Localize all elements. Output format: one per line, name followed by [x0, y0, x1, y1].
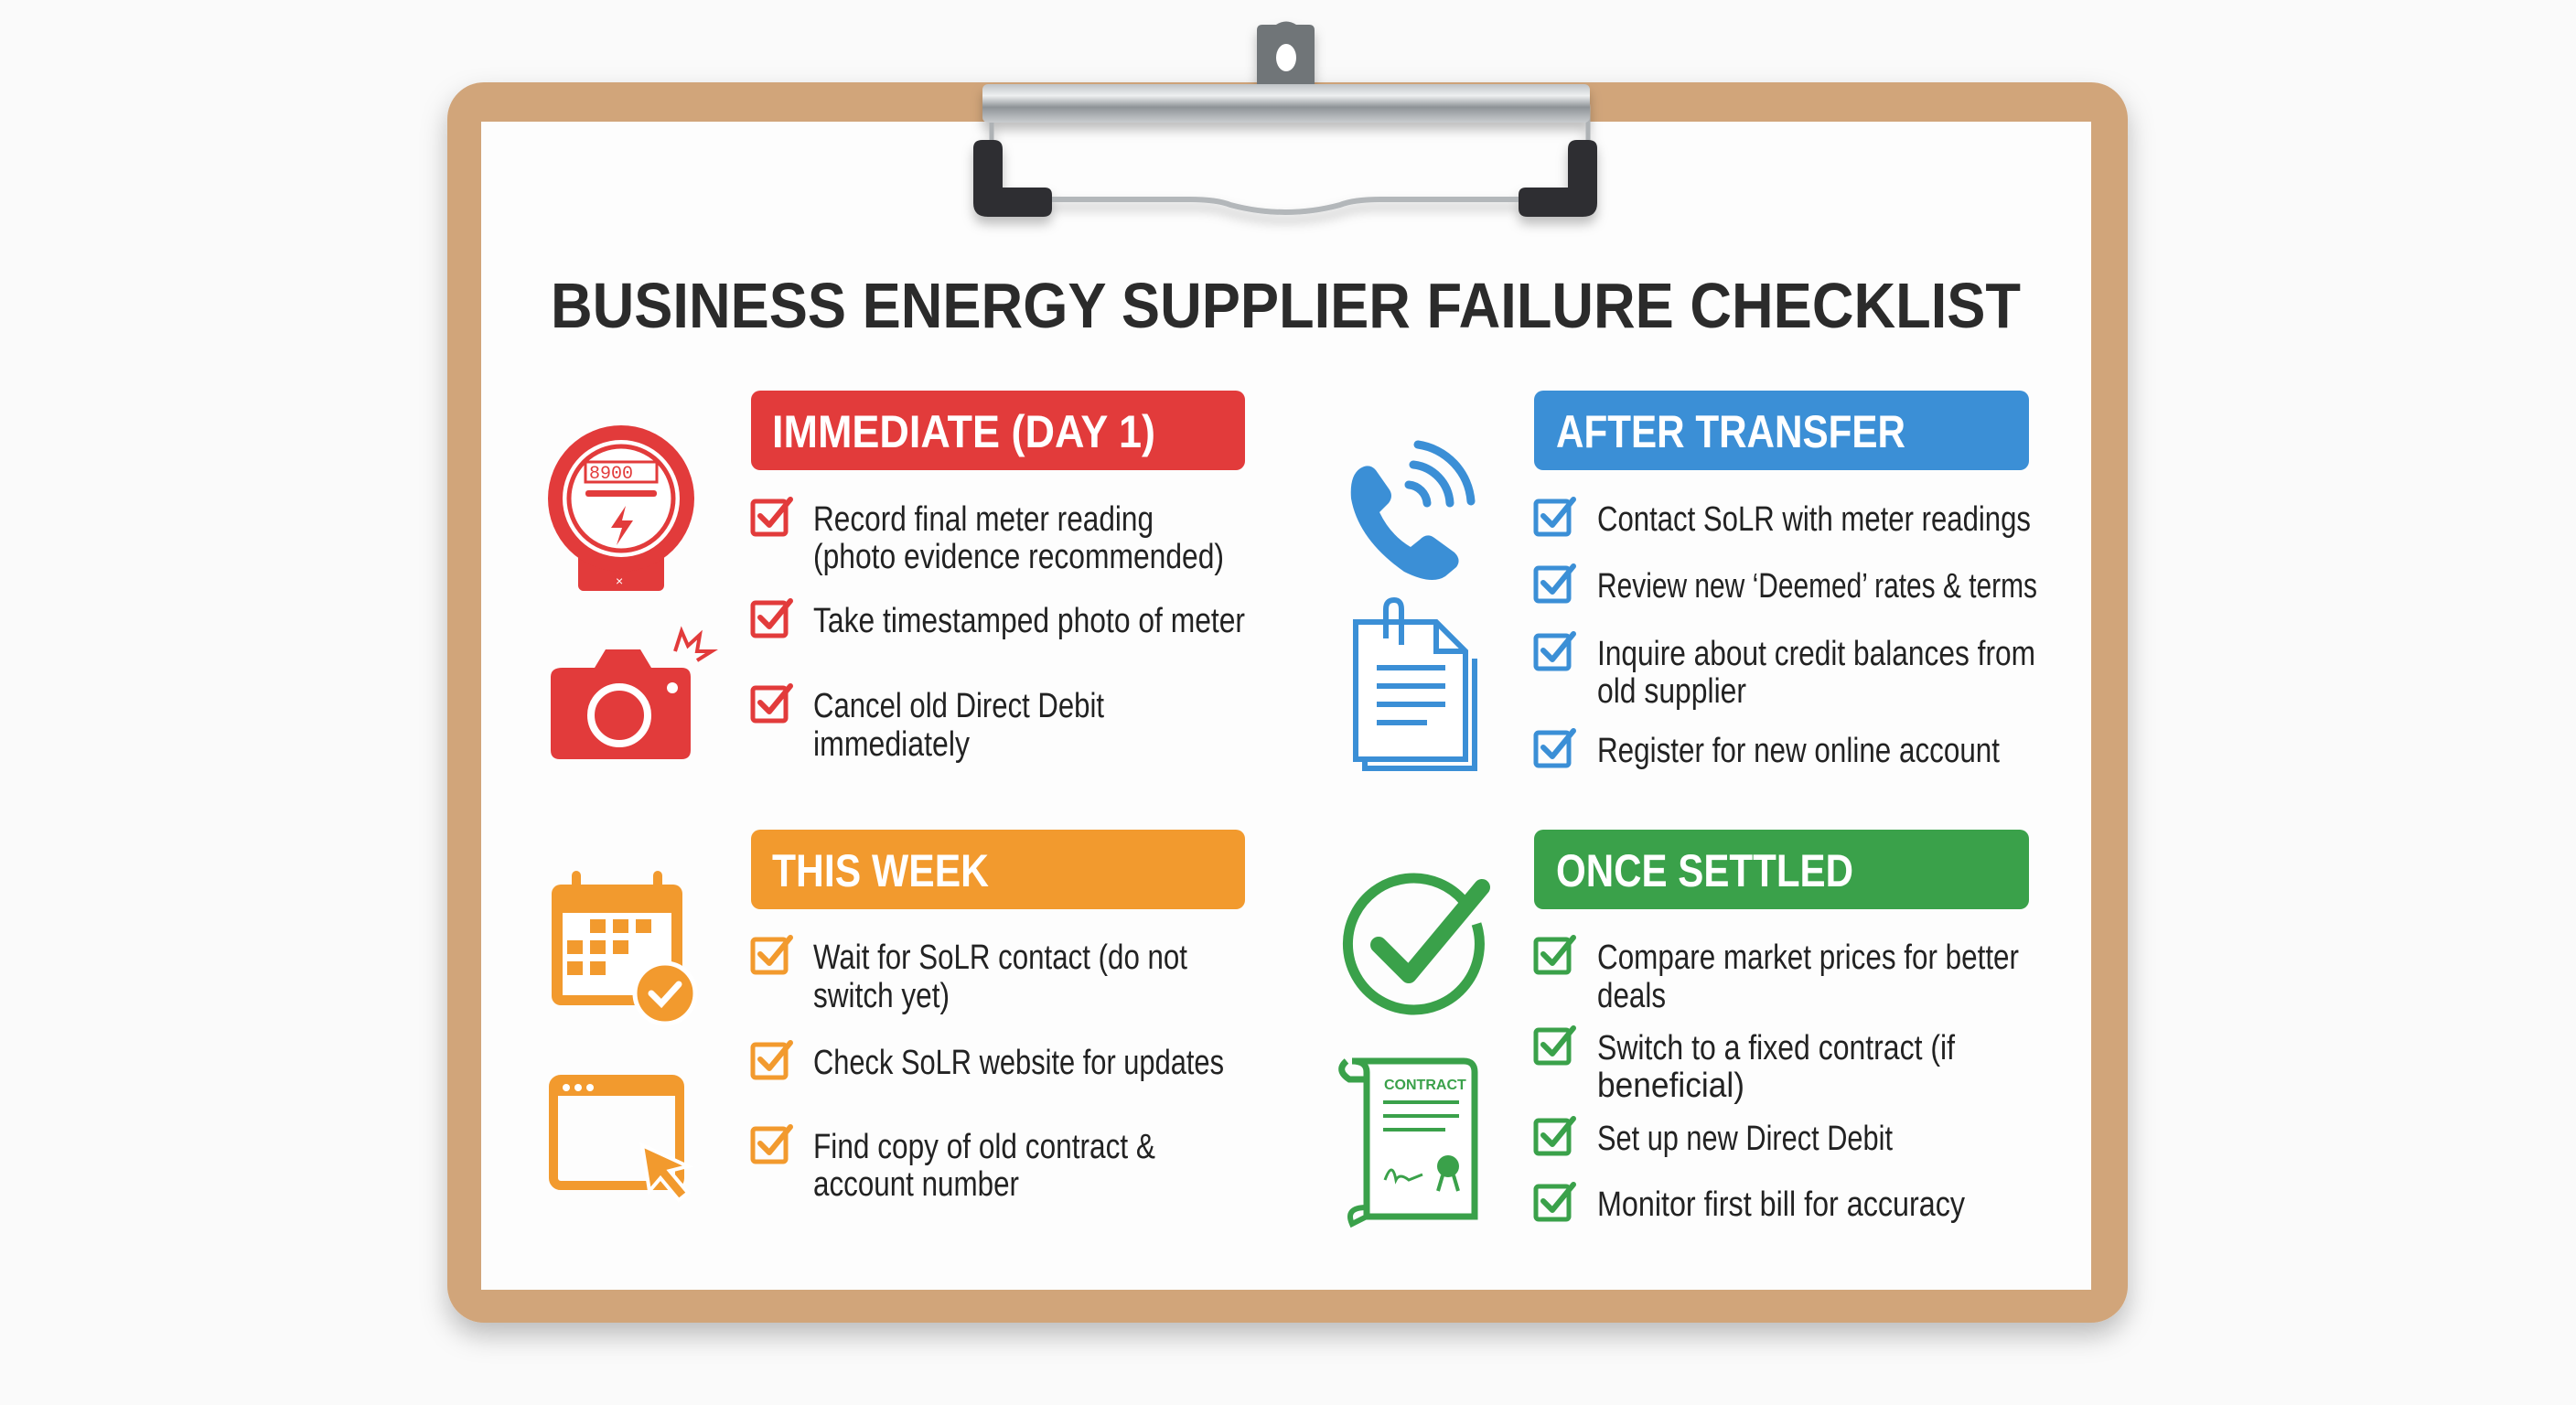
clip: [973, 22, 1597, 217]
header: immediate: IMMEDIATE (DAY 1): [772, 406, 1155, 457]
checklist: this week: [753, 938, 1224, 1204]
header: immediate: [751, 391, 1245, 470]
header: after transfer: AFTER TRANSFER: [1556, 406, 1905, 457]
checklist: immediate: Cancel old Direct Debit: [813, 687, 1104, 725]
checklist: this week: account number: [813, 1165, 1019, 1204]
icon: check circle: [1347, 878, 1482, 1010]
checklist: once settled: Compare market prices for better: [1597, 938, 2019, 977]
checklist: this week: Find copy of old contract &: [813, 1128, 1155, 1166]
checklist: once settled: Switch to a fixed contract (if: [1597, 1029, 1955, 1067]
clipboard board: [447, 82, 2128, 1323]
icon: browser cursor: [553, 1079, 688, 1200]
icon: electricity meter: [548, 425, 694, 591]
checklist: once settled: beneficial): [1597, 1067, 1744, 1105]
icon: camera: [551, 631, 712, 759]
header: this week: [751, 830, 1245, 909]
checklist: once settled: Set up new Direct Debit: [1597, 1120, 1893, 1158]
checklist: once settled: deals: [1597, 977, 1666, 1015]
checklist: immediate: Record final meter reading: [813, 500, 1154, 539]
checklist: immediate: (photo evidence recommended): [813, 538, 1224, 576]
icon: contract: CONTRACT: [1384, 1078, 1466, 1093]
icon: electricity meter: 8900: [589, 464, 633, 485]
checklist: immediate: [753, 499, 1245, 764]
checklist: this week: Wait for SoLR contact (do not: [813, 938, 1187, 977]
icon: contract: [1342, 1061, 1475, 1224]
header: after transfer: [1534, 391, 2029, 470]
checklist: immediate: Take timestamped photo of meter: [813, 602, 1245, 640]
icon: calendar: [552, 871, 695, 1024]
icon: documents: [1356, 600, 1475, 768]
panel: once settled: [1534, 830, 2029, 1224]
icon: electricity meter: ×: [616, 574, 623, 588]
checklist: after transfer: Review new ‘Deemed’ rates & terms: [1597, 567, 2037, 606]
paper sheet: [481, 122, 2091, 1290]
panel: immediate: [751, 391, 1245, 764]
panel: this week: [751, 830, 1245, 1204]
header: once settled: ONCE SETTLED: [1556, 845, 1853, 896]
icon: phone: [1351, 445, 1471, 580]
checklist: after transfer: [1536, 499, 2037, 770]
checklist: this week: Check SoLR website for updates: [813, 1044, 1224, 1082]
panel: after transfer: [1534, 391, 2037, 770]
header: once settled: [1534, 830, 2029, 909]
checklist: once settled: [1536, 938, 2019, 1224]
checklist: immediate: immediately: [813, 725, 970, 764]
checklist: after transfer: Register for new online account: [1597, 732, 2000, 770]
title: BUSINESS ENERGY SUPPLIER FAILURE CHECKLIST: [551, 270, 2021, 341]
checklist: after transfer: Inquire about credit balances from: [1597, 635, 2035, 673]
checklist: once settled: Monitor first bill for accuracy: [1597, 1185, 1965, 1224]
checklist: after transfer: Contact SoLR with meter readings: [1597, 500, 2031, 539]
checklist: after transfer: old supplier: [1597, 672, 1746, 711]
checklist: this week: switch yet): [813, 977, 950, 1015]
header: this week: THIS WEEK: [772, 845, 989, 896]
